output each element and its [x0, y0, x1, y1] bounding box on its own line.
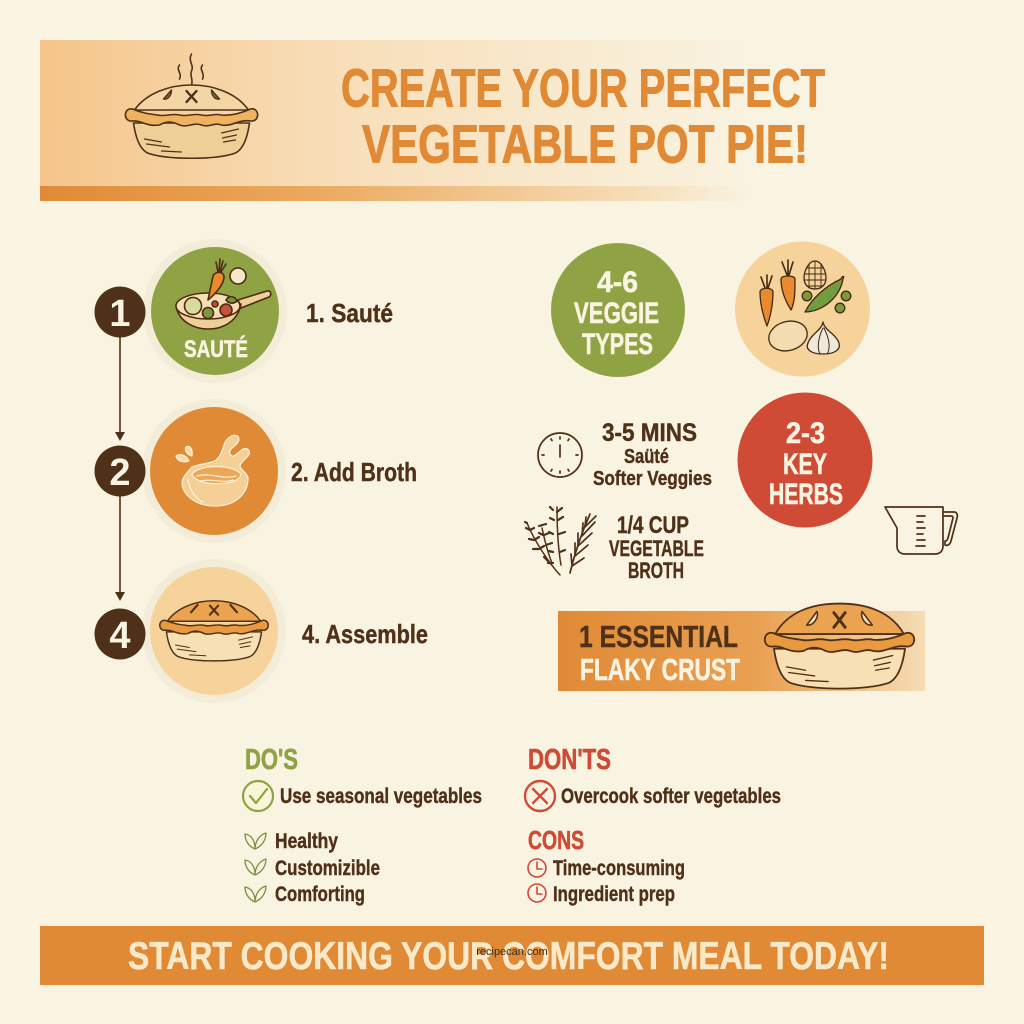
stat: veggie types: 4-6 — [597, 266, 638, 299]
number badge 2: 2 — [109, 452, 131, 494]
step connector arrows — [115, 337, 125, 601]
stat: veggie types: VEGGIE — [574, 297, 659, 330]
don'ts column: DON'TS — [528, 744, 611, 776]
essential crust banner: FLAKY CRUST — [580, 652, 740, 687]
stat: vegetable broth — [609, 512, 704, 583]
step 4: assemble — [142, 559, 286, 703]
stat: vegetable broth: BROTH — [628, 558, 684, 583]
essential crust banner: 1 ESSENTIAL — [579, 619, 738, 654]
stat: key herbs: 2-3 — [786, 417, 825, 450]
icon: pea pod — [805, 276, 844, 312]
stat: key herbs — [738, 392, 872, 528]
step 2 text: 2. Add Broth — [291, 457, 417, 487]
icon: potato — [765, 317, 811, 355]
icon: saute pan with vegetables — [176, 259, 271, 329]
icon: garlic — [807, 322, 839, 354]
do's column: Customizible — [275, 857, 380, 880]
stat: vegetable broth: 1/4 CUP — [617, 512, 689, 539]
title — [341, 58, 825, 174]
icon: leaves — [245, 833, 266, 902]
stat: key herbs: KEY — [783, 448, 827, 481]
icon: measuring cup — [885, 507, 957, 554]
stat: saute time: Saüté — [624, 446, 669, 468]
icon: crosshatched vegetable — [804, 261, 826, 289]
header banner — [40, 40, 1024, 201]
number badge 1 — [94, 286, 146, 338]
do's column — [243, 744, 482, 906]
stat: veggie types: TYPES — [582, 328, 653, 361]
don'ts column — [525, 744, 781, 906]
icon: broth splash in bowl — [176, 435, 249, 506]
icon: large pie — [765, 604, 914, 689]
do's column: DO'S — [245, 744, 298, 776]
do's column: Use seasonal vegetables — [280, 785, 482, 808]
stat: saute time: Softer Veggies — [593, 468, 712, 490]
step 2: add broth — [142, 399, 286, 543]
do's column: Comforting — [275, 883, 365, 906]
step 1 text: 1. Sauté — [306, 298, 393, 328]
icon: carrot — [760, 275, 773, 326]
step label: SAUTÉ — [184, 335, 248, 363]
do's column: Healthy — [275, 830, 338, 853]
icon: steaming pie — [125, 54, 258, 158]
watermark: recipecan.com — [476, 946, 548, 958]
don'ts column: CONS — [528, 825, 584, 855]
don'ts column: Overcook softer vegetables — [561, 785, 781, 808]
step 1: sauté — [143, 239, 287, 383]
title: VEGETABLE POT PIE! — [362, 114, 808, 174]
number badge 4: 4 — [109, 615, 131, 657]
icon: clock — [538, 433, 582, 477]
stat: saute time — [538, 419, 712, 490]
stat: saute time: 3-5 MINS — [602, 419, 697, 447]
icon: herbs — [525, 507, 596, 575]
number badge 4 — [94, 608, 146, 660]
icon: cons clocks — [528, 859, 546, 902]
icon: carrot — [781, 260, 795, 310]
stat: key herbs: HERBS — [769, 478, 843, 511]
icon: peas — [802, 291, 851, 313]
call to action banner — [40, 926, 984, 985]
icon: golden pie — [160, 601, 268, 661]
icon: cross — [525, 781, 555, 811]
step 4 text: 4. Assemble — [302, 619, 428, 649]
stat: veggie types — [551, 243, 685, 377]
essential crust banner — [558, 604, 925, 691]
don'ts column: Time-consuming — [553, 857, 685, 880]
stat: vegetable broth: VEGETABLE — [609, 536, 704, 561]
number badge 2 — [94, 446, 146, 496]
icon: check — [243, 781, 273, 811]
don'ts column: Ingredient prep — [553, 883, 675, 906]
vegetables illustration — [735, 242, 870, 376]
number badge 1: 1 — [109, 293, 131, 335]
title: CREATE YOUR PERFECT — [341, 58, 825, 118]
